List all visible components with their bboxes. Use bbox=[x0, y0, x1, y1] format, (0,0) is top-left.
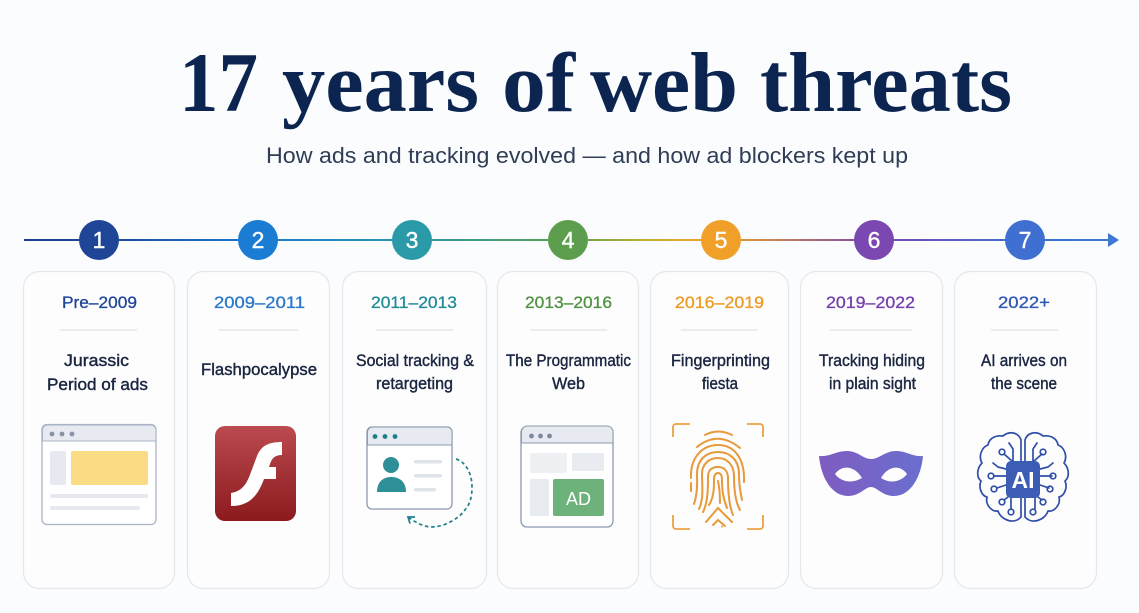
date range: 2019–2022 bbox=[826, 293, 915, 312]
era name: Flashpocalypse bbox=[201, 361, 317, 379]
marker 3: 3 bbox=[406, 227, 418, 253]
era name bbox=[981, 352, 1067, 393]
icon: browser with AD block bbox=[521, 426, 613, 527]
panel: 2011-2013 Social tracking & retargeting bbox=[342, 272, 486, 588]
title: of bbox=[502, 36, 577, 130]
marker 4 bbox=[548, 220, 588, 260]
era name: Jurassic bbox=[64, 352, 129, 370]
marker 6 bbox=[854, 220, 894, 260]
marker 1 bbox=[79, 220, 119, 260]
era name: Period of ads bbox=[47, 376, 148, 394]
marker 5 bbox=[701, 220, 741, 260]
date range: 2016–2019 bbox=[675, 293, 764, 312]
marker 1: 1 bbox=[93, 227, 105, 253]
timeline line bbox=[24, 239, 1110, 241]
title: threats bbox=[760, 36, 1012, 130]
era name: The Programmatic bbox=[506, 352, 631, 370]
timeline arrowhead bbox=[1108, 233, 1119, 247]
date range: 2013–2016 bbox=[525, 293, 612, 312]
era name: retargeting bbox=[376, 375, 453, 393]
icon: fingerprint in scan brackets bbox=[673, 424, 763, 529]
icon: browser with AD block: AD bbox=[566, 489, 591, 509]
panel: 2009-2011 Flashpocalypse bbox=[188, 272, 330, 588]
marker 3 bbox=[392, 220, 432, 260]
icon: AI brain bbox=[978, 433, 1068, 521]
title: 17 bbox=[179, 36, 258, 130]
marker 5: 5 bbox=[715, 227, 727, 253]
date range: 2022+ bbox=[998, 293, 1050, 312]
era name bbox=[671, 352, 770, 393]
marker 7: 7 bbox=[1019, 227, 1031, 253]
marker 4: 4 bbox=[562, 227, 575, 253]
era name bbox=[47, 352, 148, 394]
era name: Social tracking & bbox=[356, 352, 474, 370]
panel: 2016-2019 Fingerprinting fiesta bbox=[650, 272, 788, 588]
panel: Pre-2009 Jurassic Period of ads bbox=[24, 272, 174, 588]
icon: purple mask bbox=[819, 451, 923, 496]
icon: browser with banner ad bbox=[42, 424, 156, 524]
era name: Fingerprinting bbox=[671, 352, 770, 370]
era name: Tracking hiding bbox=[819, 352, 925, 370]
era name: in plain sight bbox=[829, 375, 916, 393]
era name: AI arrives on bbox=[981, 352, 1067, 370]
marker 7 bbox=[1005, 220, 1045, 260]
title: years bbox=[282, 36, 479, 130]
subtitle: How ads and tracking evolved — and how ad blockers kept up bbox=[266, 143, 908, 168]
date range: Pre–2009 bbox=[62, 293, 137, 312]
era name bbox=[356, 352, 474, 393]
era name: fiesta bbox=[702, 375, 739, 393]
panel: 2019-2022 Tracking hiding in plain sight bbox=[800, 272, 942, 588]
icon: flash logo bbox=[215, 426, 296, 521]
marker 6: 6 bbox=[868, 227, 880, 253]
icon: AI brain: AI bbox=[1012, 467, 1034, 493]
title: web bbox=[590, 36, 738, 130]
era name: the scene bbox=[991, 375, 1057, 393]
timeline with numbered markers bbox=[24, 220, 1119, 260]
era name: Web bbox=[552, 375, 585, 393]
marker 2: 2 bbox=[252, 227, 264, 253]
title bbox=[179, 36, 1012, 130]
marker 2 bbox=[238, 220, 278, 260]
panel: 2013-2016 The Programmatic Web bbox=[498, 272, 638, 588]
era name bbox=[506, 352, 631, 393]
date range: 2009–2011 bbox=[214, 293, 305, 312]
icon: profile retargeting browser bbox=[367, 427, 472, 527]
panel: 2022+ AI arrives on the scene bbox=[954, 272, 1096, 588]
era name bbox=[819, 352, 925, 393]
date range: 2011–2013 bbox=[371, 293, 457, 312]
